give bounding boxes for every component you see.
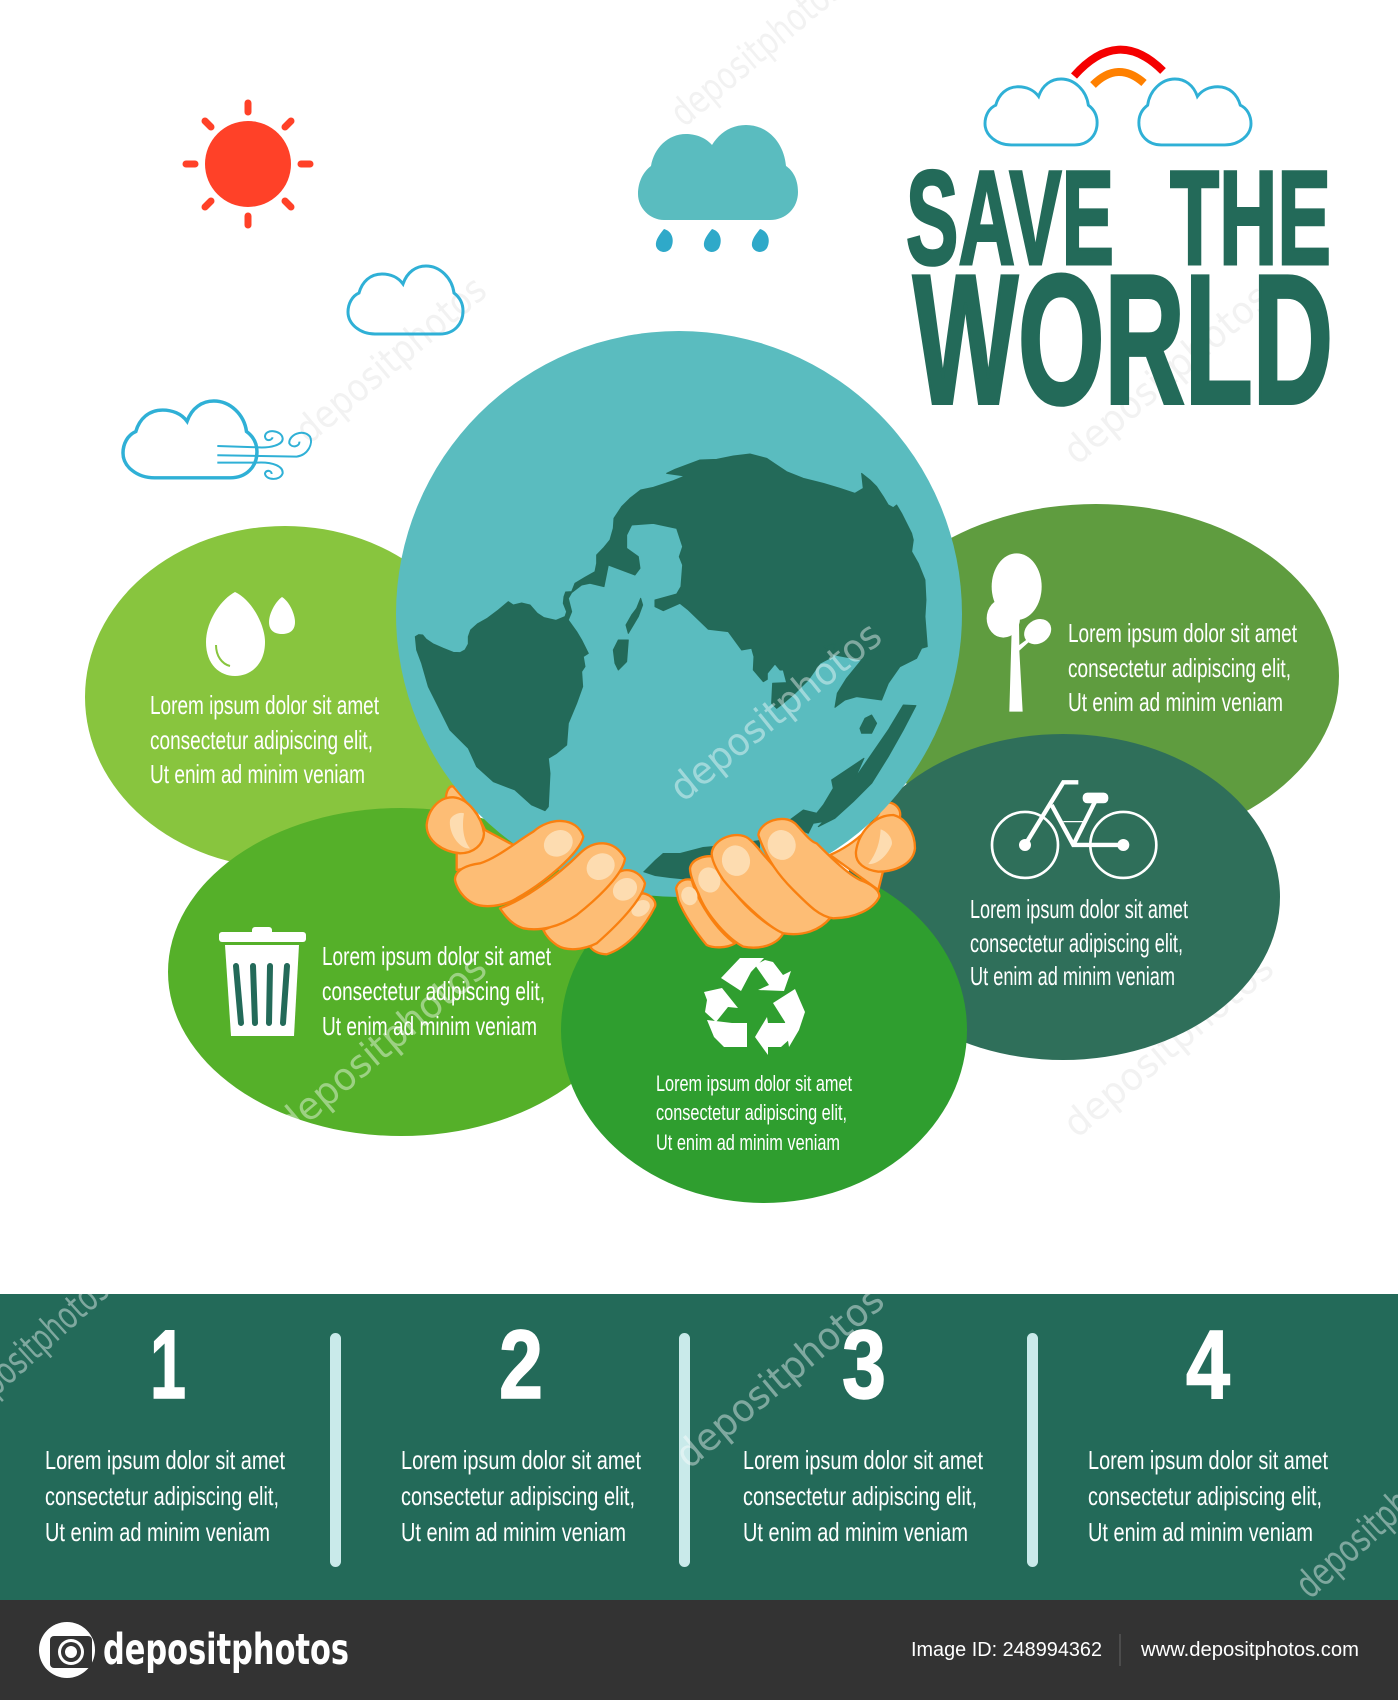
column 2 — [401, 1310, 642, 1547]
column 2: Ut enim ad minim veniam — [401, 1517, 626, 1547]
watermarks over the scene: depositphotos — [268, 945, 495, 1146]
title — [906, 144, 1333, 442]
column 3: Lorem ipsum dolor sit amet — [743, 1445, 984, 1475]
southern land — [643, 840, 760, 880]
watermarks on white background: depositphotos — [1055, 275, 1278, 473]
title: SAVE — [906, 144, 1114, 293]
panel: tree: Lorem ipsum dolor sit amet — [1068, 618, 1298, 648]
panel: recycle: consectetur adipiscing elit, — [656, 1100, 847, 1125]
column 1: consectetur adipiscing elit, — [45, 1481, 279, 1511]
icon: tree — [987, 553, 1056, 712]
watermarks on white background — [287, 0, 1282, 1146]
column 4: 4 — [1186, 1310, 1230, 1419]
watermarks on white background: depositphotos — [287, 267, 495, 452]
column 2: Lorem ipsum dolor sit amet — [401, 1445, 642, 1475]
icon: cloud — [348, 266, 463, 334]
icon: water drops — [206, 592, 295, 676]
icon: rain cloud — [638, 125, 798, 252]
left hand — [427, 797, 655, 954]
panel: water: consectetur adipiscing elit, — [150, 725, 373, 755]
icon: bicycle — [992, 782, 1156, 878]
panel: trash — [168, 808, 634, 1136]
panel: bicycle: Ut enim ad minim veniam — [970, 961, 1175, 991]
panel: numbered band — [0, 1294, 1398, 1600]
watermarks over the scene: depositphotos — [661, 613, 890, 810]
icon: recycle arrows — [704, 958, 805, 1055]
icon: windy cloud — [123, 401, 311, 479]
column 4: Lorem ipsum dolor sit amet — [1088, 1445, 1329, 1475]
column 4: consectetur adipiscing elit, — [1088, 1481, 1322, 1511]
panel: recycle — [561, 857, 967, 1203]
panel: bicycle: Lorem ipsum dolor sit amet — [970, 894, 1189, 924]
panel: bicycle — [846, 734, 1280, 1060]
column 3: consectetur adipiscing elit, — [743, 1481, 977, 1511]
column 2: 2 — [499, 1310, 543, 1419]
column 4 — [1088, 1310, 1329, 1547]
watermarks over the scene — [268, 613, 890, 1146]
panel: trash: Ut enim ad minim veniam — [322, 1011, 537, 1041]
globe — [396, 331, 962, 897]
column 2: consectetur adipiscing elit, — [401, 1481, 635, 1511]
right hand — [676, 815, 915, 948]
panel: water — [85, 526, 485, 868]
panel: tree: consectetur adipiscing elit, — [1068, 653, 1291, 683]
band watermarks — [0, 1267, 1398, 1607]
panel: trash: consectetur adipiscing elit, — [322, 976, 545, 1006]
column 1: 1 — [150, 1310, 186, 1419]
column 4: Ut enim ad minim veniam — [1088, 1517, 1313, 1547]
icon: sun — [186, 103, 310, 225]
panel: trash: Lorem ipsum dolor sit amet — [322, 941, 552, 971]
footer logo — [39, 1622, 349, 1678]
footer bar: Image ID: 248994362 — [911, 1639, 1102, 1661]
column 3: 3 — [842, 1310, 886, 1419]
rainbow and clouds above title — [985, 50, 1251, 145]
panel: water: Ut enim ad minim veniam — [150, 759, 365, 789]
icon: trash can — [219, 927, 306, 1036]
column 1: Lorem ipsum dolor sit amet — [45, 1445, 286, 1475]
panel: recycle: Lorem ipsum dolor sit amet — [656, 1071, 852, 1096]
column 3: Ut enim ad minim veniam — [743, 1517, 968, 1547]
panel: tree — [853, 504, 1339, 848]
panel: water: Lorem ipsum dolor sit amet — [150, 690, 380, 720]
band watermarks: depositphotos — [667, 1277, 892, 1477]
column 1 — [45, 1310, 286, 1547]
footer logo: depositphotos — [103, 1625, 349, 1675]
hand palms behind globe — [446, 786, 900, 890]
footer bar — [0, 1600, 1398, 1700]
column 1: Ut enim ad minim veniam — [45, 1517, 270, 1547]
footer bar: www.depositphotos.com — [1140, 1639, 1359, 1661]
watermarks on white background: depositphotos — [1055, 945, 1282, 1146]
continents — [415, 454, 927, 833]
panel: recycle: Ut enim ad minim veniam — [656, 1130, 840, 1155]
column 3 — [743, 1310, 984, 1547]
panel: tree: Ut enim ad minim veniam — [1068, 687, 1283, 717]
panel: bicycle: consectetur adipiscing elit, — [970, 928, 1183, 958]
